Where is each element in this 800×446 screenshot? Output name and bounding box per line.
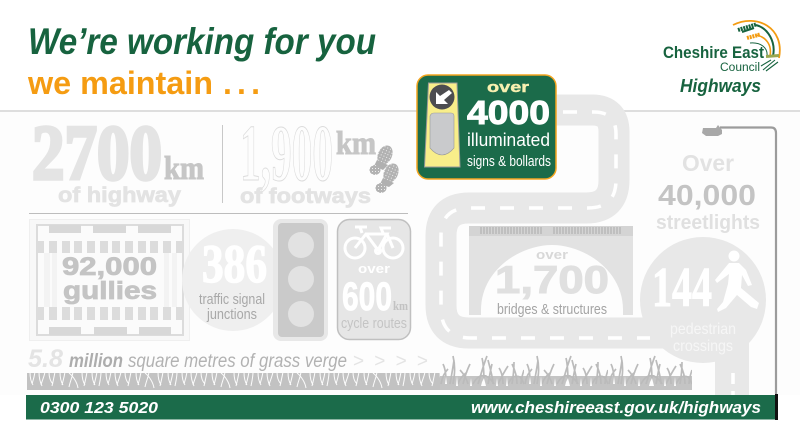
panel: streetlights: 40,000 <box>658 180 756 212</box>
icon: bicycle <box>345 227 403 258</box>
road <box>441 110 749 395</box>
panel: cycle routes: over <box>358 261 390 276</box>
icon: footprints <box>370 143 402 193</box>
header divider <box>0 110 800 112</box>
panel: pedestrian crossings: 144 <box>652 257 712 319</box>
panel: gullies <box>30 220 190 340</box>
stat: highway: km <box>164 151 204 187</box>
panel: cycle routes: cycle routes <box>341 315 407 332</box>
icon: traffic light <box>273 219 328 341</box>
panel: pedestrian crossings <box>640 237 766 365</box>
website: www.cheshireeast.gov.uk/highways <box>471 399 761 417</box>
stat: highway: of highway <box>58 184 181 207</box>
subtitle: we maintain <box>27 65 213 101</box>
panel: pedestrian crossings: pedestrian <box>670 321 736 338</box>
subtitle: . . . <box>223 65 260 101</box>
contact bar <box>26 394 778 420</box>
icon: pedestrian <box>715 250 759 312</box>
panel: bridges and structures: 1,700 <box>495 259 609 302</box>
panel: traffic signal junctions <box>182 229 284 331</box>
panel: gullies: gullies <box>63 277 157 305</box>
panel: illuminated signs: over <box>487 79 529 96</box>
panel: traffic signal junctions: junctions <box>206 306 257 323</box>
stat: footways: of footways <box>240 185 371 208</box>
logo: Cheshire East Council Highways: Cheshire East <box>663 43 764 62</box>
stat: footways <box>240 110 376 208</box>
logo: Cheshire East Council Highways <box>663 21 780 96</box>
panel: illuminated signs: illuminated <box>467 129 550 150</box>
icon: bollard <box>424 83 460 167</box>
panel: cycle routes: 600 <box>342 275 392 319</box>
grass verge text: square metres of grass verge <box>128 351 347 372</box>
title: We’re working for you <box>28 21 376 62</box>
stat: footways: 1,900 <box>240 110 333 198</box>
panel: bridges and structures: over <box>536 247 568 262</box>
phone number: 0300 123 5020 <box>40 400 158 417</box>
panel: streetlights: Over <box>682 150 734 176</box>
panel: bridges and structures: bridges & structures <box>497 301 607 318</box>
panel: gullies: 92,000 <box>62 253 157 281</box>
panel: cycle routes <box>338 220 410 340</box>
panel: bridges and structures <box>469 226 633 318</box>
panel: traffic signal junctions: traffic signal <box>199 291 265 308</box>
panel: pedestrian crossings: crossings <box>673 338 733 355</box>
icon: wheat sheaf <box>733 21 780 71</box>
grass verge text <box>28 345 428 373</box>
stat: highway: 2700 <box>32 109 162 196</box>
grass verge text: 5.8 <box>28 345 63 373</box>
panel: streetlights <box>656 150 760 234</box>
panel: illuminated signs: signs & bollards <box>467 153 551 170</box>
grass <box>27 354 692 390</box>
panel: cycle routes: km <box>393 298 408 313</box>
logo: Cheshire East Council Highways: Highways <box>680 76 761 96</box>
panel: illuminated signs <box>417 75 556 179</box>
background panel <box>0 112 800 395</box>
grass verge text: million <box>69 351 123 372</box>
panel: illuminated signs: 4000 <box>467 94 550 131</box>
panel: traffic signal junctions: 386 <box>202 234 267 294</box>
panel: streetlights: streetlights <box>656 212 760 234</box>
stat: footways: km <box>336 126 376 162</box>
grass verge text: > > > > <box>353 351 428 372</box>
icon: street lamp <box>702 125 776 394</box>
logo: Cheshire East Council Highways: Council <box>720 62 760 74</box>
